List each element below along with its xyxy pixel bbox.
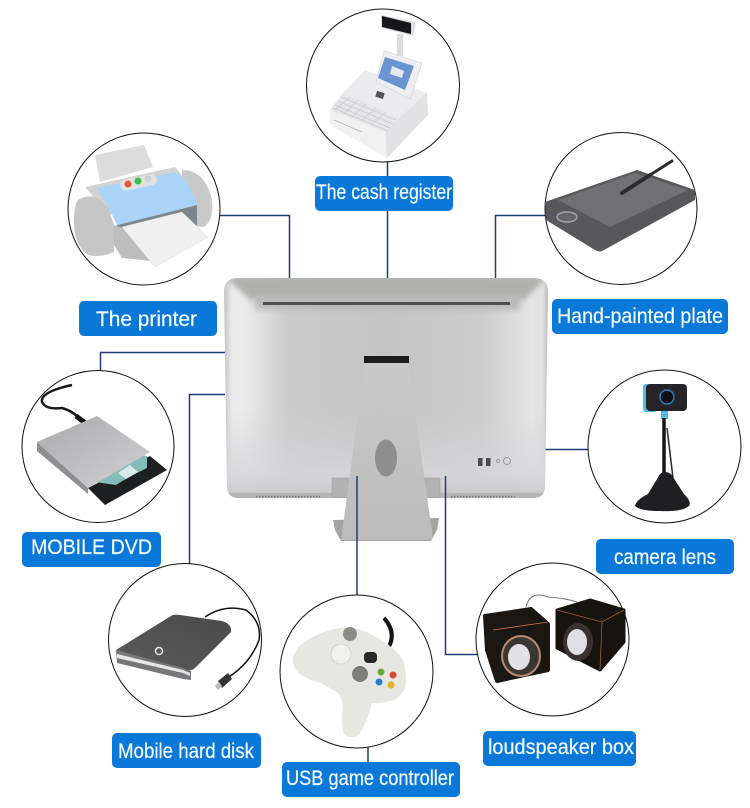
printer paper	[122, 212, 208, 267]
stand foot	[333, 518, 439, 541]
label: usb game controller: USB game controller	[286, 767, 454, 790]
stand hinge bar	[332, 478, 440, 498]
circle: hand-painted plate	[545, 132, 697, 284]
drive casing	[37, 442, 88, 494]
label: the printer: The printer	[96, 308, 197, 331]
stand top notch	[364, 356, 409, 363]
connector lines above the computer	[100, 160, 589, 763]
cable hole	[375, 440, 397, 476]
blue cover	[97, 172, 197, 225]
bottom vents	[256, 496, 515, 498]
circle: camera	[588, 370, 741, 523]
disc tray	[88, 456, 167, 505]
circle: cash register	[306, 9, 460, 162]
stand neck	[341, 363, 433, 540]
left speaker	[485, 609, 548, 681]
label: loudspeaker box	[483, 731, 636, 766]
stylus	[622, 175, 650, 193]
speaker wire	[526, 595, 577, 607]
label: usb game controller	[282, 762, 460, 797]
usb ports	[478, 458, 490, 466]
right speaker	[557, 600, 624, 670]
circle: hard disk	[108, 564, 262, 716]
power button	[496, 458, 510, 464]
connector lines crossing the computer	[357, 476, 477, 654]
circle: mobile dvd	[22, 370, 174, 522]
controller cable	[383, 618, 392, 655]
body of register	[343, 70, 427, 117]
cable	[42, 385, 84, 424]
circle: printer	[68, 133, 220, 285]
all-in-one computer back view	[224, 276, 548, 541]
label: mobile hard disk: Mobile hard disk	[118, 740, 254, 763]
label: mobile dvd: MOBILE DVD	[31, 536, 152, 559]
circle: loudspeaker	[476, 563, 629, 716]
label: the printer	[79, 301, 217, 336]
label: mobile hard disk	[112, 733, 261, 768]
printer buttons	[119, 173, 158, 192]
label: camera lens	[596, 539, 734, 574]
label: mobile dvd	[22, 532, 161, 567]
hard disk cable	[205, 608, 259, 680]
label: hand-painted plate: Hand-painted plate	[557, 305, 723, 328]
label: the cash register: The cash register	[316, 181, 452, 204]
top slot	[263, 302, 510, 305]
label: the cash register	[315, 176, 453, 211]
pole display	[381, 15, 416, 36]
touch screen	[376, 51, 422, 99]
controller body	[293, 628, 406, 737]
label: loudspeaker box: loudspeaker box	[488, 736, 634, 759]
monitor body	[224, 276, 548, 498]
circle: usb game controller	[280, 595, 433, 748]
label: hand-painted plate	[552, 299, 728, 334]
label: camera lens: camera lens	[614, 546, 716, 569]
